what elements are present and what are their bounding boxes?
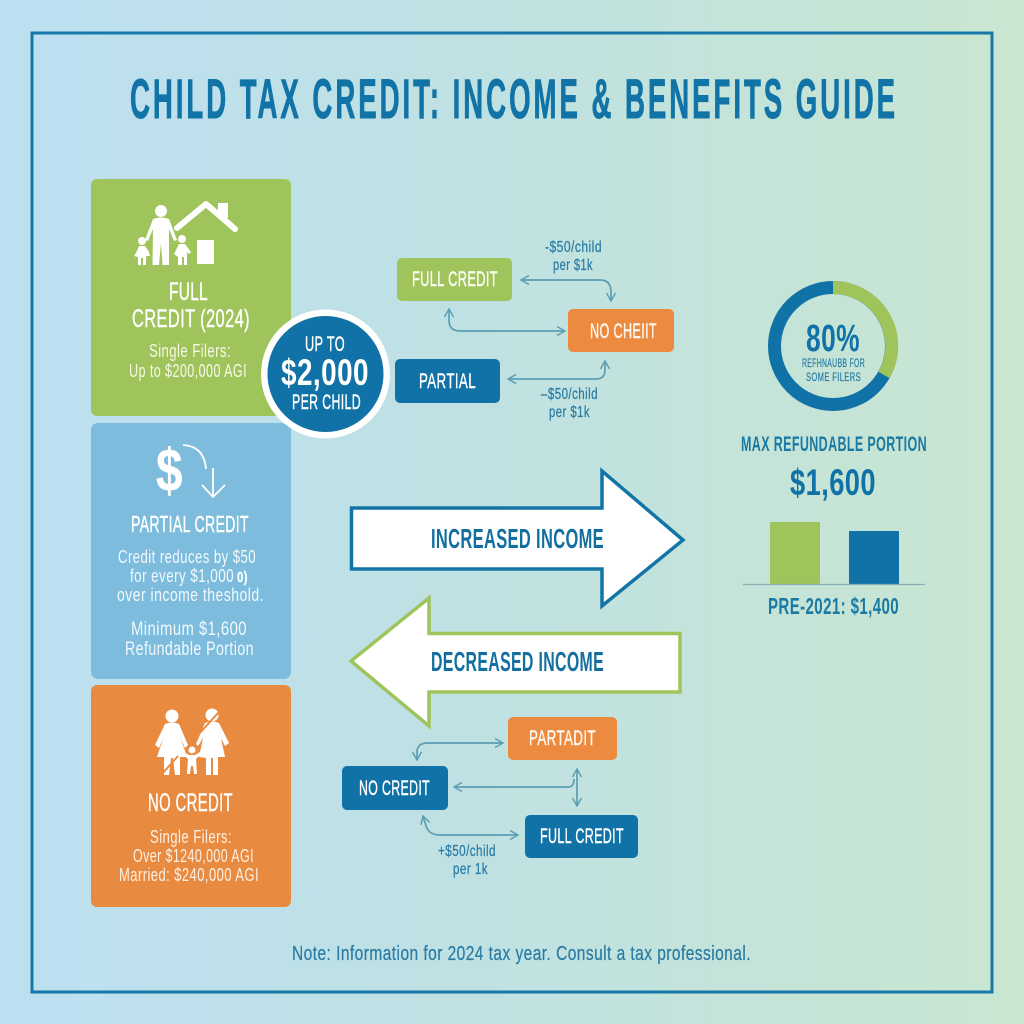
box: full credit: FULL CREDIT: [540, 825, 624, 848]
arrow: partial to no credit: [508, 361, 605, 379]
label: reduction rate upper: [545, 239, 602, 274]
arrow: full credit to no credit: [521, 280, 611, 301]
label: increase rate: per 1k: [453, 861, 488, 878]
box: no credit: [342, 766, 448, 810]
flow diagram: top: [395, 239, 674, 421]
arrow: partial and full credit link: [576, 769, 578, 806]
label: reduction rate lower: –$50/child: [541, 386, 598, 403]
chart: refundable donut: 80%: [806, 318, 860, 360]
chart: refundable donut: REFHNAUBB FOR: [802, 356, 865, 370]
box: no credit: NO CREDIT: [359, 777, 430, 800]
box: full credit: FULL CREDIT: [412, 268, 498, 291]
icon: crossed-out family: [155, 708, 229, 775]
box: partial: PARTIAL: [419, 370, 476, 393]
box: no credit: [568, 309, 674, 352]
label: pre-2021: PRE-2021: $1,400: [768, 593, 899, 619]
arrow: increased income: [352, 471, 683, 606]
text: minimum refundable: [125, 619, 254, 660]
box: full credit: [525, 815, 638, 858]
text: minimum refundable: Refundable Portion: [125, 639, 254, 660]
text: reduction rule: for every $1,000: [130, 566, 234, 586]
text: income limits: Single Filers:: [150, 827, 232, 847]
label: increase rate: +$50/child: [438, 843, 496, 860]
detail: single filers: Single Filers:: [149, 341, 231, 361]
panel: partial credit: [91, 423, 291, 679]
box: partial: [395, 359, 500, 403]
arrow: branch to no credit: [454, 779, 574, 787]
label: reduction rate lower: [541, 386, 598, 421]
icon: dollar with down arrow: $: [156, 437, 183, 504]
arrow: no credit to partial: [417, 743, 503, 760]
arrow: full credit and no credit lower link: [449, 309, 565, 331]
arrow: decreased income: DECREASED INCOME: [431, 646, 604, 677]
panel: full credit: [91, 179, 291, 416]
detail: AGI limit: Up to $200,000 AGI: [129, 361, 247, 381]
heading: credit 2024: CREDIT (2024): [132, 305, 250, 333]
text: income limits: Over $1240,000 AGI: [133, 846, 254, 866]
heading: partial credit: PARTIAL CREDIT: [131, 511, 249, 537]
box: partial: PARTADIT: [529, 727, 596, 750]
label: reduction rate lower: per $1k: [549, 404, 590, 421]
text: income limits: [119, 827, 259, 885]
text: reduction rule: over income theshold.: [117, 585, 264, 605]
chart: bar comparison: [743, 522, 925, 584]
heading: full credit: FULL: [169, 278, 208, 306]
text: reduction rule: 0): [237, 569, 248, 586]
badge: up to $2,000 per child: [261, 310, 390, 438]
badge: up to $2,000 per child: $2,000: [281, 352, 369, 393]
label: reduction rate upper: per $1k: [553, 257, 593, 274]
label: reduction rate upper: -$50/child: [545, 239, 602, 256]
footnote: Note: Information for 2024 tax year. Consult a tax professional.: [292, 943, 751, 965]
icon: family and house: [134, 203, 235, 265]
arrow: increased income: INCREASED INCOME: [431, 523, 604, 554]
badge: up to $2,000 per child: PER CHILD: [292, 391, 361, 414]
heading: no credit: NO CREDIT: [148, 789, 233, 817]
chart: refundable donut: [774, 287, 892, 404]
icon: dollar with down arrow: [156, 437, 225, 504]
text: reduction rule: [117, 547, 264, 605]
arrow: no credit to full credit: [423, 816, 518, 835]
text: minimum refundable: Minimum $1,600: [131, 619, 247, 640]
box: partial: [508, 717, 617, 760]
panel: no credit: [91, 685, 291, 907]
badge: up to $2,000 per child: UP TO: [305, 333, 345, 356]
figure: $1,600: $1,600: [790, 462, 876, 503]
flow diagram: bottom: [342, 717, 638, 878]
box: full credit: [397, 258, 512, 301]
arrow: decreased income: [351, 598, 680, 726]
text: reduction rule: Credit reduces by $50: [118, 547, 256, 567]
chart: refundable donut: SOME FILERS: [806, 370, 861, 384]
box: no credit: NO CHEIIT: [590, 320, 657, 343]
text: income limits: Married: $240,000 AGI: [119, 865, 259, 885]
label: increase rate: [438, 843, 496, 878]
